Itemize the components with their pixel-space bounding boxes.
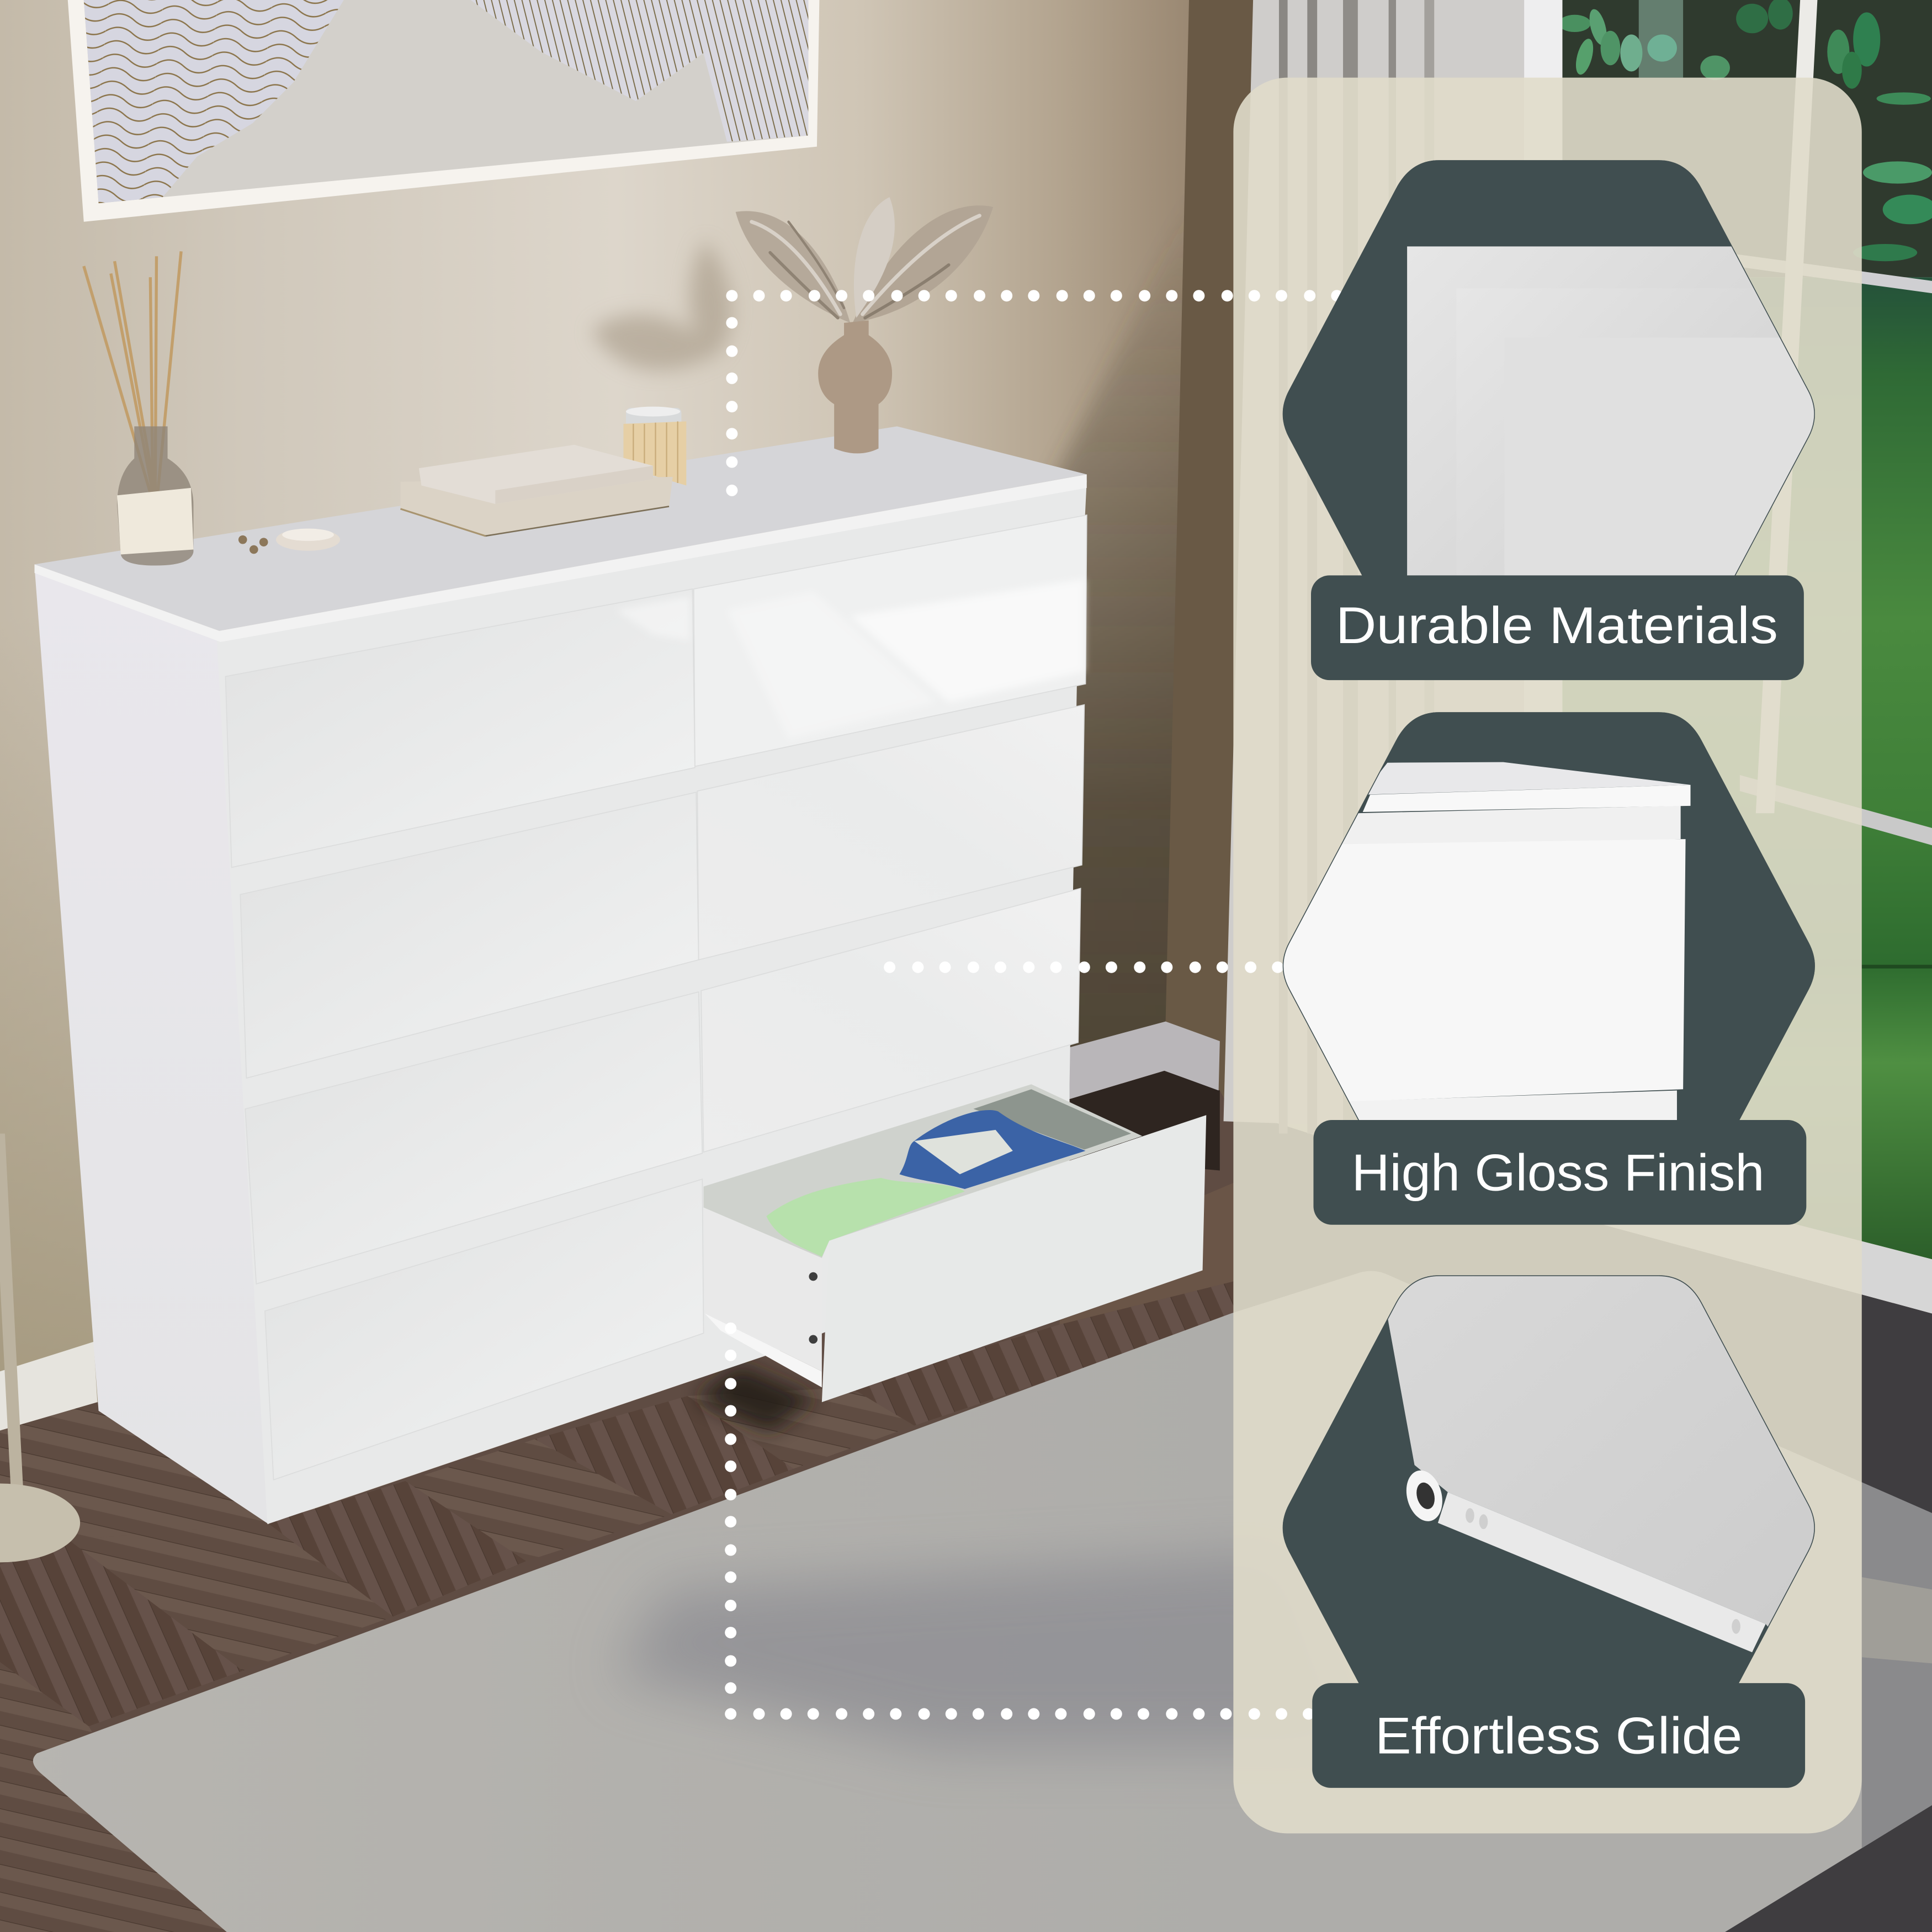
herringbone planks [0,1183,1233,1932]
stacked books [400,445,673,536]
dotted connector: durable materials [726,290,1342,496]
baseboard right [1070,1021,1220,1099]
dark floor [1232,1109,1932,1932]
pampas wall shadow [591,240,732,370]
blue clothes [899,1110,1086,1189]
vase body [818,320,892,453]
panel: features [1269,148,1826,1793]
frame [68,0,819,222]
hexagon: drawer runner [1283,1275,1815,1684]
rug shadow band [616,1552,1355,1750]
green clothes [766,1178,965,1257]
contour band right [471,0,808,142]
drawer screw holes [809,1272,818,1344]
drawer inside [704,1084,1142,1258]
label: Durable Materials [1336,596,1778,654]
label: Effortless Glide [1375,1706,1742,1764]
drawer fronts [225,515,1087,1480]
wooden floor [0,1071,1233,1932]
rug right highlight [1862,1577,1932,1663]
dark floor corner [1070,1071,1220,1171]
clothes inner [914,1130,1013,1174]
dotted connector: high gloss finish [884,962,1283,973]
feature: effortless glide [1269,1263,1824,1793]
top front edge [34,474,1087,642]
curtain [1224,0,1562,1134]
candle [623,407,686,485]
shaded wall strip [1166,0,1254,1121]
feature: high gloss finish [1269,702,1824,1232]
window foliage [1559,0,1932,277]
dotted connector: effortless glide [725,1323,1314,1719]
top surface [34,426,1087,631]
print [84,0,808,203]
pampas plumes [736,197,993,323]
floor lamp [0,1134,80,1562]
front frame [217,481,1087,1524]
framed wall art [68,0,819,222]
rug [33,1271,1932,1932]
drawer lip [705,1313,822,1387]
contour band left [84,0,344,203]
window sill [1562,1164,1932,1313]
window mullion [1756,0,1817,813]
label box [1311,575,1804,680]
side panel [34,567,269,1524]
hexagon: layered sheets [1283,160,1815,575]
hexagon: gloss corner [1283,712,1815,1120]
trinket dish and rings [238,529,340,554]
label box [1313,1120,1806,1225]
lower left wall shade [0,616,136,1479]
drawer side [704,1208,822,1371]
panel background [1233,78,1862,1833]
floor shadow under drawer [696,1365,816,1432]
rug right strip [1862,1482,1932,1848]
drawer inner wall [973,1089,1131,1150]
feature: durable materials [1269,148,1826,683]
open drawer [704,1084,1206,1402]
dresser [34,426,1206,1524]
wall [0,0,1232,1479]
gloss reflections [616,579,1084,739]
drawer front [822,1115,1206,1402]
lower right wall shade [1047,185,1201,1084]
label: High Gloss Finish [1352,1143,1764,1201]
vase with pampas [736,197,993,453]
label box [1312,1683,1805,1788]
window frame horizontals [1734,254,1932,293]
sheer lawn band line [1862,965,1932,968]
window lawn [1562,277,1932,1259]
baseboard left [0,1342,97,1431]
reed diffuser [84,251,193,566]
